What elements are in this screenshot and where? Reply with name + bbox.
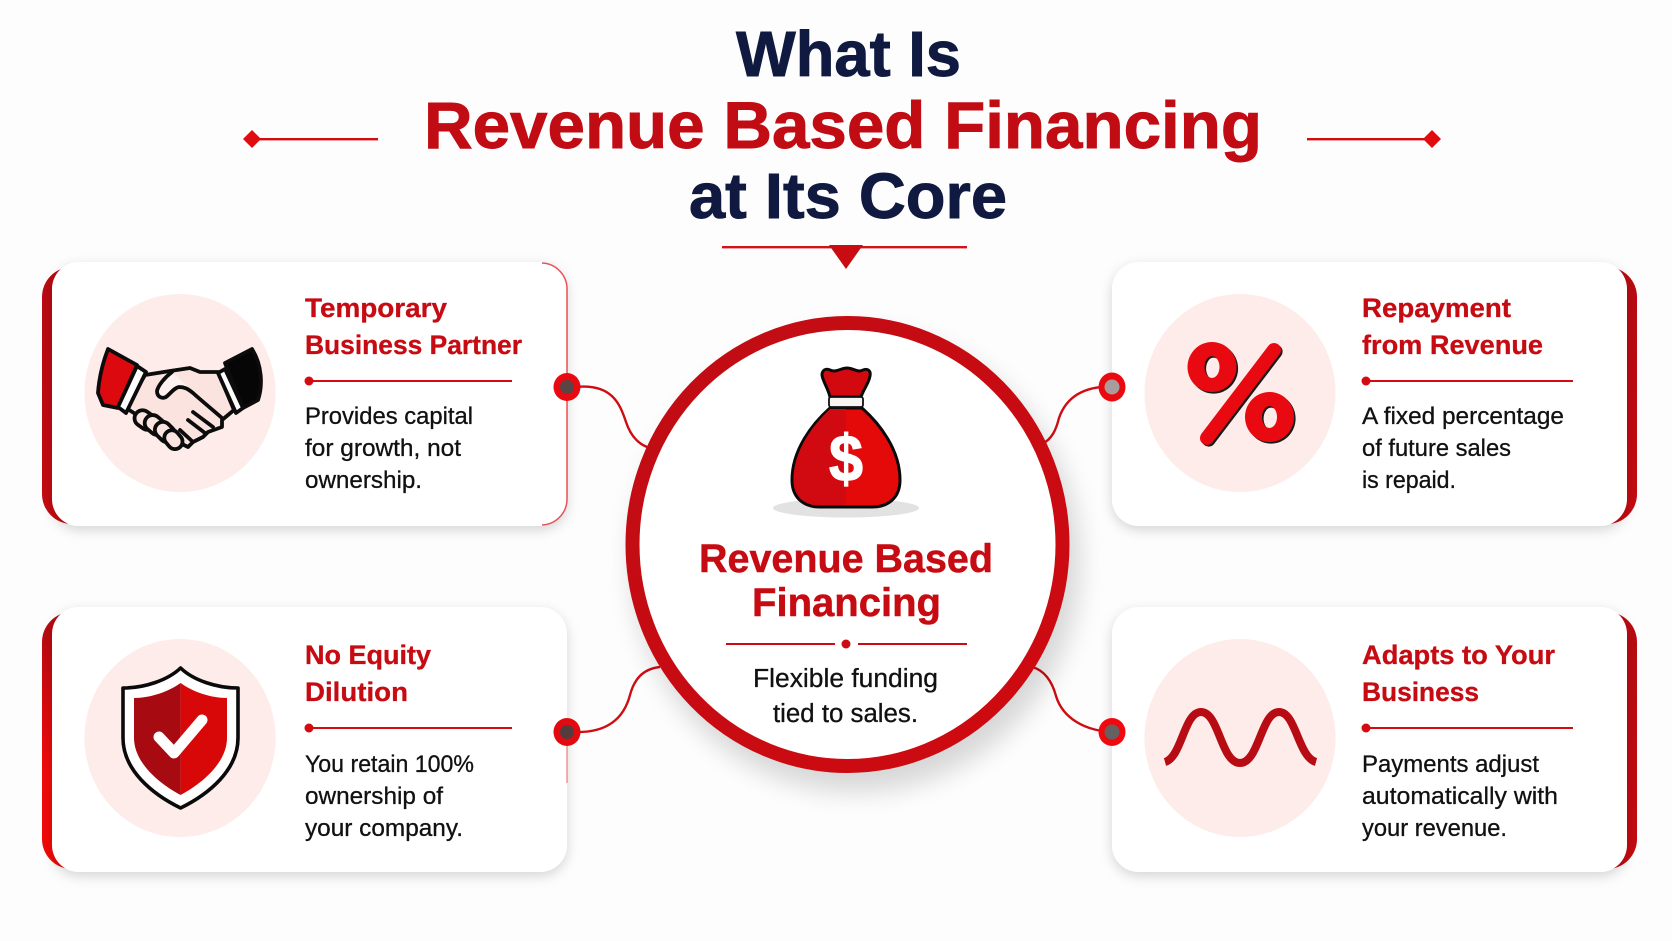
- body text: You retain 100%: [305, 751, 474, 778]
- center body text: tied to sales.: [773, 700, 918, 728]
- heading: Adapts to Your: [1362, 640, 1555, 670]
- heading: Temporary: [305, 293, 447, 323]
- connector node: bottom left: [554, 718, 580, 746]
- icon: money bag: [773, 368, 919, 518]
- title line: Revenue Based Financing: Revenue Based Financing: [424, 88, 1262, 162]
- panel: Repayment from Revenue: [1112, 262, 1637, 526]
- heading: [1362, 640, 1555, 707]
- heading: Business: [1362, 677, 1479, 707]
- body text: [1362, 403, 1564, 494]
- body text: of future sales: [1362, 435, 1511, 462]
- title line: What Is: What Is: [736, 18, 961, 90]
- heading: [305, 640, 431, 707]
- center heading: Financing: [752, 581, 941, 625]
- circle ring: [632, 323, 1062, 766]
- connectors: [575, 387, 1120, 732]
- center body text: Flexible funding: [753, 665, 938, 693]
- center body text: [753, 665, 938, 728]
- divider: [1362, 724, 1573, 732]
- body text: ownership.: [305, 467, 422, 494]
- circle shadow: [632, 332, 1080, 792]
- title: [424, 18, 1262, 232]
- body text: [305, 751, 474, 842]
- body text: for growth, not: [305, 435, 461, 462]
- connector node: bottom right: [1098, 718, 1126, 746]
- hands: [98, 349, 261, 452]
- heading: Dilution: [305, 677, 408, 707]
- panel: Adapts to Your Business: [1112, 607, 1637, 872]
- panel: Temporary Business Partner: [42, 262, 567, 526]
- shield fill: [134, 683, 227, 795]
- heading: Business Partner: [305, 330, 522, 360]
- title line: at Its Core: at Its Core: [689, 160, 1007, 232]
- body text: ownership of: [305, 783, 443, 810]
- divider: [304, 376, 512, 386]
- body text: is repaid.: [1362, 467, 1456, 494]
- dollar sign: $: [829, 421, 863, 495]
- heading: Repayment: [1362, 293, 1511, 323]
- divider: [304, 724, 512, 732]
- center divider: [726, 640, 967, 648]
- body text: [1362, 751, 1558, 842]
- divider: [1362, 376, 1573, 386]
- check mark: [159, 720, 202, 753]
- percent glyph: [1188, 342, 1294, 442]
- wave line: [1165, 712, 1316, 763]
- center heading: Revenue Based: [699, 537, 993, 581]
- icon circle: percent: [1144, 294, 1336, 492]
- heading: [1362, 293, 1543, 360]
- percent shadow: [1189, 344, 1296, 444]
- body text: Payments adjust: [1362, 751, 1539, 778]
- connector node: top left: [554, 373, 580, 401]
- icon circle: shield: [84, 639, 276, 837]
- shield outline: [123, 668, 238, 808]
- left title ornament: [243, 130, 378, 148]
- body text: Provides capital: [305, 403, 473, 430]
- body text: your company.: [305, 815, 463, 842]
- right title ornament: [1307, 130, 1441, 148]
- heading: from Revenue: [1362, 330, 1543, 360]
- heading: No Equity: [305, 640, 431, 670]
- title pointer arrow: [722, 245, 967, 269]
- center heading: [699, 537, 993, 625]
- icon circle: handshake: [84, 294, 276, 492]
- heading: [305, 293, 522, 360]
- body text: [305, 403, 473, 494]
- center circle: [632, 323, 1080, 792]
- panel: No Equity Dilution: [42, 607, 567, 872]
- icon circle: wave: [1144, 639, 1336, 837]
- body text: your revenue.: [1362, 815, 1507, 842]
- body text: automatically with: [1362, 783, 1558, 810]
- connector node: top right: [1098, 372, 1126, 402]
- body text: A fixed percentage: [1362, 403, 1564, 430]
